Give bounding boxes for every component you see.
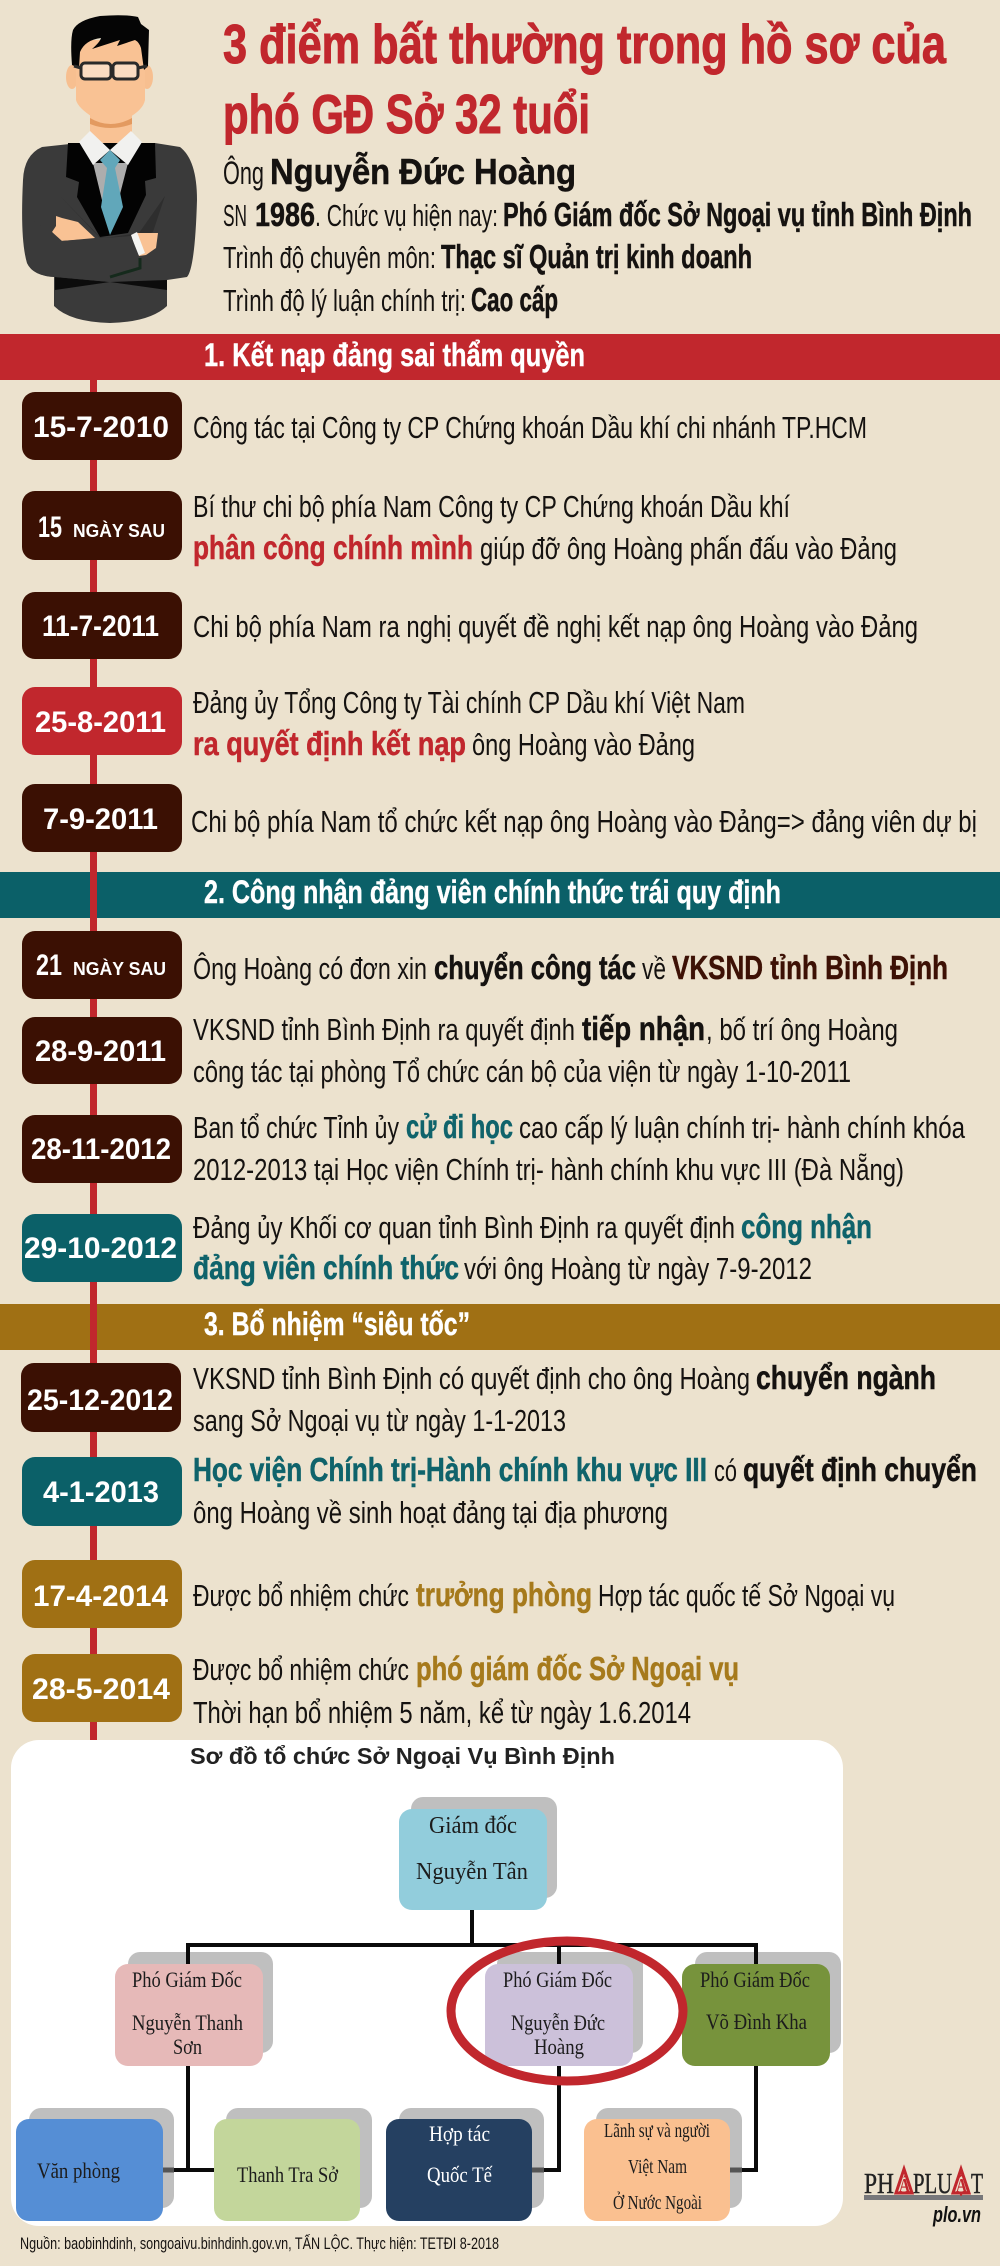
- event 25-12-2012: sang Sở Ngoại vụ từ ngày 1-1-2013: [193, 1403, 566, 1438]
- profile details: Nguyễn Đức Hoàng: [270, 151, 576, 192]
- box: Phó Giám Đốc Nguyễn Thanh Sơn: [115, 1964, 263, 2066]
- event 25-8-2011: Đảng ủy Tổng Công ty Tài chính CP Dầu khí Việt Nam: [193, 685, 745, 720]
- box: Phó Giám Đốc Nguyễn Thanh Sơn: Nguyễn Thanh: [132, 2010, 243, 2035]
- section header 2: 2. Công nhận đảng viên chính thức trái quy định: [204, 874, 781, 910]
- event 7-9-2011: [22, 784, 977, 852]
- box: Hợp tác Quốc Tế: Hợp tác: [429, 2121, 490, 2146]
- panel: organisation chart: [11, 1740, 843, 2226]
- event 17-4-2014: Được bổ nhiệm chức: [193, 1578, 409, 1613]
- box: Thanh Tra Sở: Thanh Tra Sở: [237, 2162, 338, 2187]
- profile details: Trình độ chuyên môn:: [223, 240, 436, 275]
- box: Phó Giám Đốc Nguyễn Đức Hoàng: Hoàng: [534, 2034, 584, 2059]
- event 15-7-2010: [22, 392, 867, 460]
- connectors: [163, 1910, 758, 2170]
- event 25-8-2011: ra quyết định kết nạp: [193, 725, 466, 762]
- box: Phó Giám Đốc Võ Đình Kha: [682, 1964, 830, 2066]
- event 25-8-2011: 25-8-2011: [35, 706, 166, 739]
- event 29-10-2012: 29-10-2012: [24, 1232, 177, 1265]
- section header 1: [0, 334, 1000, 380]
- event 28-5-2014: [22, 1650, 739, 1730]
- event 4-1-2013: có: [714, 1453, 737, 1488]
- source note: Nguồn: baobinhdinh, songoaivu.binhdinh.gov.vn, TẤN LỘC. Thực hiện: TETĐI 8-2018: [20, 2234, 499, 2253]
- profile details: 1986: [255, 196, 315, 233]
- event 28-9-2011: VKSND tỉnh Bình Định ra quyết định: [193, 1012, 575, 1047]
- event 17-4-2014: 17-4-2014: [33, 1580, 168, 1613]
- chart title: Sơ đồ tổ chức Sở Ngoại Vụ Bình Định: [190, 1743, 615, 1769]
- event 21 ngày sau: chuyển công tác: [434, 949, 636, 986]
- title: [223, 13, 946, 145]
- event 25-8-2011: ông Hoàng vào Đảng: [472, 727, 695, 762]
- logo: Pháp Luật: T: [971, 2169, 983, 2200]
- event 29-10-2012: đảng viên chính thức: [193, 1249, 459, 1286]
- event 11-7-2011: [22, 592, 918, 659]
- box: Giám đốc: [399, 1809, 547, 1910]
- logo: Pháp Luật: plo.vn: [932, 2202, 981, 2227]
- event 25-12-2012: [21, 1359, 936, 1438]
- event 4-1-2013: Học viện Chính trị-Hành chính khu vực III: [193, 1451, 707, 1488]
- logo: Pháp Luật: Á: [899, 2174, 910, 2197]
- event 7-9-2011: 7-9-2011: [43, 803, 158, 836]
- box: Thanh Tra Sở: [214, 2119, 360, 2221]
- box: Lãnh sự và người Việt Nam Ở Nước Ngoài: Việt Nam: [628, 2156, 687, 2178]
- event 25-12-2012: chuyển ngành: [756, 1359, 936, 1396]
- event 28-9-2011: , bố trí ông Hoàng: [706, 1012, 898, 1047]
- profile details: . Chức vụ hiện nay:: [315, 198, 498, 233]
- profile details: SN: [223, 198, 247, 233]
- box: Lãnh sự và người Việt Nam Ở Nước Ngoài: Lãnh sự và người: [604, 2120, 710, 2142]
- event 4-1-2013: [22, 1451, 977, 1530]
- event 28-11-2012: cử đi học: [406, 1108, 513, 1145]
- box: Văn phòng: Văn phòng: [37, 2158, 120, 2183]
- event 11-7-2011: 11-7-2011: [42, 610, 159, 643]
- event 15 ngày sau: Bí thư chi bộ phía Nam Công ty CP Chứng khoán Dầu khí: [193, 489, 790, 524]
- event 17-4-2014: [22, 1560, 895, 1628]
- highlight ellipse: [451, 1941, 683, 2081]
- box: Phó Giám Đốc Nguyễn Đức Hoàng: Phó Giám Đốc: [503, 1967, 612, 1992]
- box: Giám đốc: Giám đốc: [429, 1813, 517, 1839]
- box: Phó Giám Đốc Võ Đình Kha: Phó Giám Đốc: [700, 1967, 810, 1992]
- title: phó GĐ Sở 32 tuổi: [223, 83, 590, 145]
- icon: businessman with crossed arms: [22, 15, 197, 323]
- event 15 ngày sau: 15: [38, 511, 62, 544]
- event 28-9-2011: 28-9-2011: [35, 1035, 166, 1068]
- event 28-11-2012: Ban tổ chức Tỉnh ủy: [193, 1110, 399, 1145]
- section header 1: 1. Kết nạp đảng sai thẩm quyền: [204, 337, 585, 373]
- event 28-5-2014: Được bổ nhiệm chức: [193, 1652, 409, 1687]
- profile details: Cao cấp: [471, 281, 558, 318]
- event 29-10-2012: Đảng ủy Khối cơ quan tỉnh Bình Định ra quyết định: [193, 1210, 735, 1245]
- timeline line: [90, 380, 97, 1740]
- box: Phó Giám Đốc Nguyễn Thanh Sơn: Phó Giám Đốc: [132, 1967, 242, 1992]
- event 29-10-2012: công nhận: [741, 1208, 872, 1245]
- section header 2: [0, 872, 1000, 918]
- profile details: [223, 151, 972, 318]
- event 28-5-2014: 28-5-2014: [32, 1673, 170, 1706]
- section header 3: 3. Bổ nhiệm “siêu tốc”: [204, 1306, 470, 1342]
- event 17-4-2014: trưởng phòng: [416, 1576, 592, 1613]
- event 15 ngày sau: phân công chính mình: [193, 529, 473, 566]
- event 4-1-2013: 4-1-2013: [43, 1476, 159, 1509]
- event 28-5-2014: Thời hạn bổ nhiệm 5 năm, kể từ ngày 1.6.2014: [193, 1695, 691, 1730]
- timeline: section 3 events: [21, 1359, 977, 1730]
- profile details: Thạc sĩ Quản trị kinh doanh: [441, 238, 752, 275]
- logo: Pháp Luật: Ậ: [956, 2174, 967, 2197]
- event 28-9-2011: [22, 1010, 898, 1089]
- event 29-10-2012: với ông Hoàng từ ngày 7-9-2012: [464, 1251, 812, 1286]
- box: Phó Giám Đốc Võ Đình Kha: Võ Đình Kha: [706, 2009, 807, 2034]
- logo: Pháp Luật: PLU: [913, 2169, 952, 2200]
- timeline: section 2 events: [22, 931, 966, 1286]
- box: Hợp tác Quốc Tế: [386, 2119, 532, 2221]
- box: Văn phòng: [16, 2119, 163, 2221]
- event 21 ngày sau: 21: [36, 949, 62, 982]
- box shadows: [29, 1797, 841, 2208]
- event 21 ngày sau: [22, 931, 948, 999]
- event 28-5-2014: phó giám đốc Sở Ngoại vụ: [416, 1650, 739, 1687]
- section header 3: [0, 1304, 1000, 1350]
- event 15 ngày sau: [22, 489, 897, 566]
- event 25-12-2012: VKSND tỉnh Bình Định có quyết định cho ông Hoàng: [193, 1361, 750, 1396]
- box: Giám đốc: Nguyễn Tân: [416, 1859, 528, 1885]
- profile details: Trình độ lý luận chính trị:: [223, 283, 466, 318]
- box: Phó Giám Đốc Nguyễn Đức Hoàng: Nguyễn Đức: [511, 2010, 605, 2035]
- event 28-11-2012: [22, 1108, 966, 1187]
- logo: Pháp Luật: [864, 2169, 983, 2227]
- event 21 ngày sau: NGÀY SAU: [73, 958, 166, 979]
- event 15 ngày sau: NGÀY SAU: [73, 520, 165, 541]
- event 29-10-2012: [22, 1208, 872, 1286]
- event 21 ngày sau: Ông Hoàng có đơn xin: [193, 951, 427, 986]
- timeline: section 1 events: [22, 392, 977, 852]
- event 15-7-2010: 15-7-2010: [33, 411, 169, 444]
- box: Hợp tác Quốc Tế: Quốc Tế: [427, 2162, 493, 2187]
- box: Phó Giám Đốc Nguyễn Thanh Sơn: Sơn: [173, 2034, 202, 2059]
- event 25-12-2012: 25-12-2012: [27, 1384, 173, 1417]
- event 28-11-2012: 28-11-2012: [31, 1133, 171, 1166]
- box: Lãnh sự và người Việt Nam Ở Nước Ngoài: [584, 2119, 730, 2221]
- event 25-8-2011: [22, 685, 745, 762]
- profile details: Ông: [223, 155, 264, 191]
- logo: Pháp Luật: PH: [864, 2169, 894, 2200]
- event 28-9-2011: tiếp nhận: [582, 1010, 705, 1047]
- event 17-4-2014: Hợp tác quốc tế Sở Ngoại vụ: [598, 1578, 895, 1613]
- box: Lãnh sự và người Việt Nam Ở Nước Ngoài: Ở Nước Ngoài: [613, 2191, 702, 2214]
- event 4-1-2013: ông Hoàng về sinh hoạt đảng tại địa phương: [193, 1495, 668, 1530]
- event 21 ngày sau: về: [642, 951, 666, 986]
- box: Phó Giám Đốc Nguyễn Đức Hoàng: [485, 1964, 633, 2066]
